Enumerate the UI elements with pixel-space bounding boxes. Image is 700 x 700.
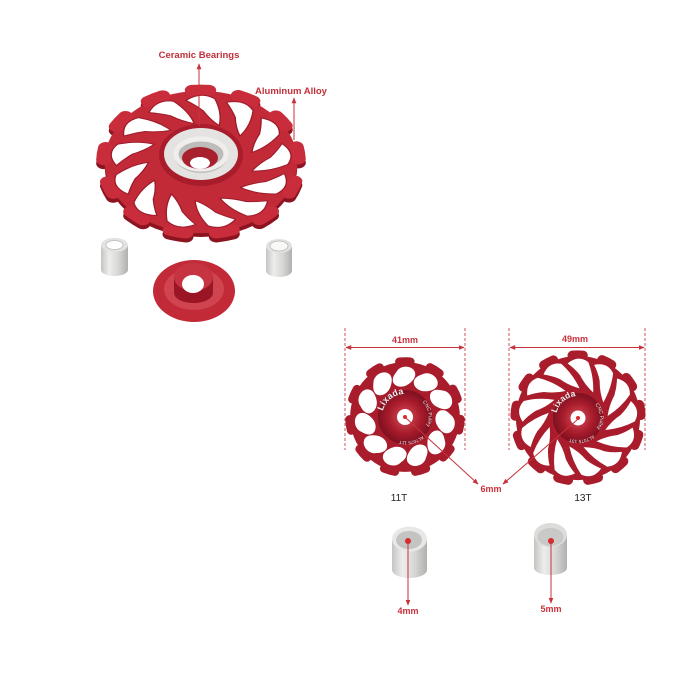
13T hub with brand text: CNC Pulley [596, 403, 604, 430]
pulley body with teeth [81, 73, 321, 255]
11T pulley [345, 357, 465, 476]
11T hub with brand text [377, 389, 432, 444]
11T hub with brand text: AL7075 11T [398, 436, 424, 444]
spacer sleeve right [266, 239, 292, 277]
dimension: 49mm width [509, 328, 645, 450]
label: 13T: 13T [574, 493, 592, 504]
6mm callout with arrows [406, 418, 577, 494]
4mm spacer with arrow: 4mm [397, 606, 419, 616]
spacer sleeve left [101, 238, 128, 276]
label: 11T: 11T [391, 493, 407, 504]
13T pulley [510, 350, 646, 485]
13T hub with brand text: Lixada [551, 392, 576, 412]
13T hub with brand text [551, 392, 604, 444]
13T body and windows [500, 340, 656, 496]
13T hub with brand text: AL7075 13T [568, 435, 594, 444]
5mm spacer with arrow [534, 523, 567, 614]
label: Ceramic Bearings: Ceramic Bearings [159, 50, 239, 61]
11T body and windows [347, 359, 463, 475]
label: Aluminum Alloy: Aluminum Alloy [255, 86, 328, 97]
4mm spacer with arrow [392, 526, 427, 616]
dimension: 41mm width [345, 328, 465, 450]
5mm spacer with arrow: 5mm [540, 604, 562, 614]
label: Aluminum Alloy [255, 86, 328, 140]
ceramic bearing hub [159, 124, 243, 186]
dimension: 41mm width: 41mm [392, 335, 418, 345]
11T hub with brand text: CNC Pulley [423, 400, 432, 428]
large pulley wheel: ceramic bearing and aluminum alloy [81, 73, 321, 255]
label: Ceramic Bearings [159, 50, 239, 126]
dimension: 49mm width: 49mm [562, 334, 588, 344]
6mm callout with arrows: 6mm [480, 484, 502, 494]
11T hub with brand text: Lixada [377, 389, 404, 410]
flanged red cap [153, 260, 235, 322]
